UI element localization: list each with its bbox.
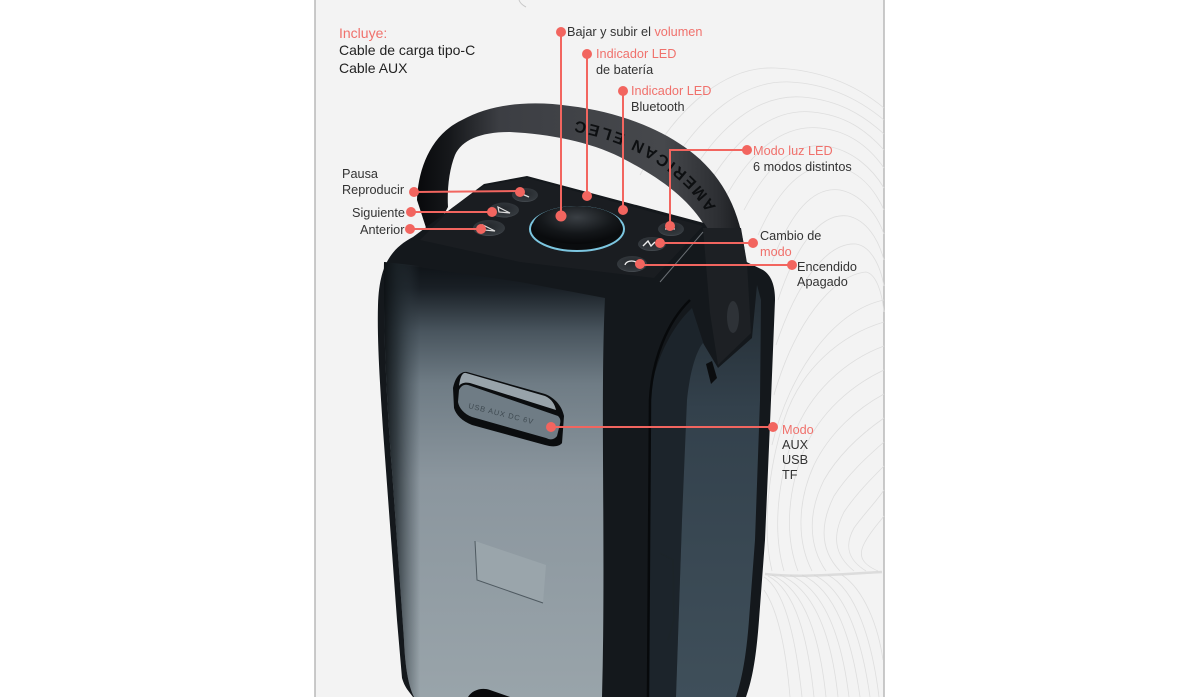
callout: modo luz LED: Modo luz LED <box>753 144 833 158</box>
text: incluye: Incluye: <box>339 25 387 41</box>
speaker product illustration <box>378 103 775 697</box>
callout: pausa reproducir: Pausa <box>342 167 379 181</box>
speaker product illustration: AMERICAN ELEC <box>574 121 716 210</box>
callout: modo AUX USB TF: USB <box>782 453 808 467</box>
callout: LED bateria <box>582 47 676 201</box>
side notch <box>706 361 717 384</box>
callout: encendido apagado <box>635 259 857 289</box>
callout: LED Bluetooth: Indicador LED <box>631 84 711 98</box>
button: play pause <box>512 188 538 202</box>
button: light mode <box>658 222 684 236</box>
strap rivet <box>727 301 739 333</box>
callout: cambio de modo: Cambio de <box>760 229 821 243</box>
nameplate recess <box>475 541 546 603</box>
side panel <box>676 285 761 697</box>
strap tab <box>703 228 751 365</box>
callout: pausa reproducir: Reproducir <box>342 183 405 197</box>
left rim shading <box>384 262 422 697</box>
side dark band <box>648 308 704 697</box>
top face <box>420 178 703 278</box>
button: next <box>489 202 519 218</box>
button: previous <box>473 220 505 236</box>
callout: modo AUX USB TF: AUX <box>782 438 809 452</box>
top face seam highlight <box>660 232 703 282</box>
callout: modo AUX USB TF: Modo <box>782 423 814 437</box>
callout: pausa reproducir <box>342 167 525 197</box>
text: incluye: Cable AUX <box>339 60 408 76</box>
callout: LED bateria: Indicador LED <box>596 47 676 61</box>
volume knob <box>530 206 624 251</box>
callout: LED Bluetooth: Bluetooth <box>631 100 685 114</box>
crease in the wave pattern <box>765 572 882 576</box>
bottom foot <box>468 689 510 697</box>
callout: modo luz LED <box>665 144 852 231</box>
callout: LED bateria: de batería <box>596 63 654 77</box>
text: incluye: Cable de carga tipo-C <box>339 42 475 58</box>
callout: modo AUX USB TF <box>546 422 814 482</box>
port cover <box>453 372 564 446</box>
callout: siguiente: Siguiente <box>352 206 405 220</box>
nameplate edge <box>475 541 543 603</box>
hang hole arc <box>519 0 526 7</box>
handle strap <box>417 103 746 262</box>
button: mode <box>638 237 666 251</box>
callout: modo AUX USB TF: TF <box>782 468 798 482</box>
callout: modo luz LED: 6 modos distintos <box>753 160 852 174</box>
wave line background <box>640 68 884 697</box>
dark seam <box>648 300 690 697</box>
text: incluye <box>339 25 475 76</box>
button: power <box>617 256 647 272</box>
speaker body <box>378 176 775 697</box>
callout: volumen: Bajar y subir el volumen <box>567 25 702 39</box>
callout: LED Bluetooth <box>618 84 711 215</box>
callout: siguiente <box>352 206 497 220</box>
callout: cambio de modo: modo <box>760 245 792 259</box>
callout: cambio de modo <box>655 229 821 259</box>
panel: packaging card <box>315 0 884 697</box>
callout: anterior <box>360 223 486 237</box>
port labels: USB AUX DC 6V <box>468 401 535 426</box>
callout: encendido apagado: Apagado <box>797 275 848 289</box>
strap lettering <box>505 112 716 207</box>
callout: anterior: Anterior <box>360 223 405 237</box>
side slot <box>660 553 674 640</box>
callout: encendido apagado: Encendido <box>797 260 857 274</box>
front gray panel <box>384 262 605 697</box>
callout: volumen <box>556 25 702 222</box>
